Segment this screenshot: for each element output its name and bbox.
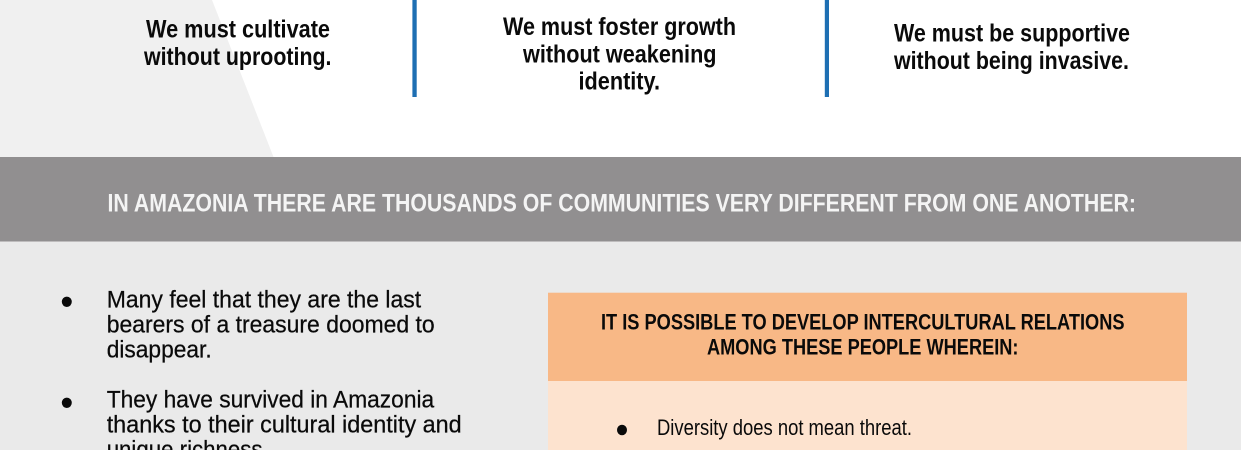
column divider right — [825, 0, 829, 97]
panel body background — [548, 381, 1187, 450]
grey banner — [0, 157, 1241, 242]
statement: supportive: We must be supportive — [894, 20, 1130, 48]
bullet item: survived: They have survived in Amazonia — [107, 387, 435, 414]
bullet item: last bearers: Many feel that they are the last — [107, 287, 421, 314]
statement: foster growth: identity. — [578, 68, 660, 96]
left bullet list — [62, 287, 462, 450]
panel heading: IT IS POSSIBLE TO DEVELOP INTERCULTURAL RELATIONS — [601, 310, 1124, 334]
statement: cultivate: We must cultivate — [146, 16, 330, 44]
panel heading: AMONG THESE PEOPLE WHEREIN: — [707, 335, 1018, 360]
column divider left — [412, 0, 417, 97]
statement: supportive: without being invasive. — [893, 47, 1129, 75]
bullet item: last bearers: bearers of a treasure doomed to — [107, 312, 435, 339]
panel header background — [548, 293, 1187, 381]
bullet item: survived: thanks to their cultural identity and — [107, 412, 462, 439]
top section — [0, 0, 1130, 157]
panel: intercultural relations — [548, 293, 1187, 450]
statement: supportive — [893, 20, 1130, 75]
statement: foster growth: without weakening — [522, 40, 716, 68]
bullet item: survived — [62, 387, 462, 450]
statement: cultivate — [143, 16, 332, 71]
statement: cultivate: without uprooting. — [143, 43, 332, 71]
statement: foster growth — [503, 13, 736, 96]
bullet item: last bearers — [62, 287, 435, 364]
panel heading — [601, 310, 1124, 360]
background shape: grey wedge — [0, 0, 274, 157]
lower background — [0, 241, 1241, 450]
bullet item: last bearers: disappear. — [107, 337, 212, 364]
panel bullet item: Diversity does not mean threat. — [657, 415, 912, 440]
statement: foster growth: We must foster growth — [503, 13, 736, 41]
